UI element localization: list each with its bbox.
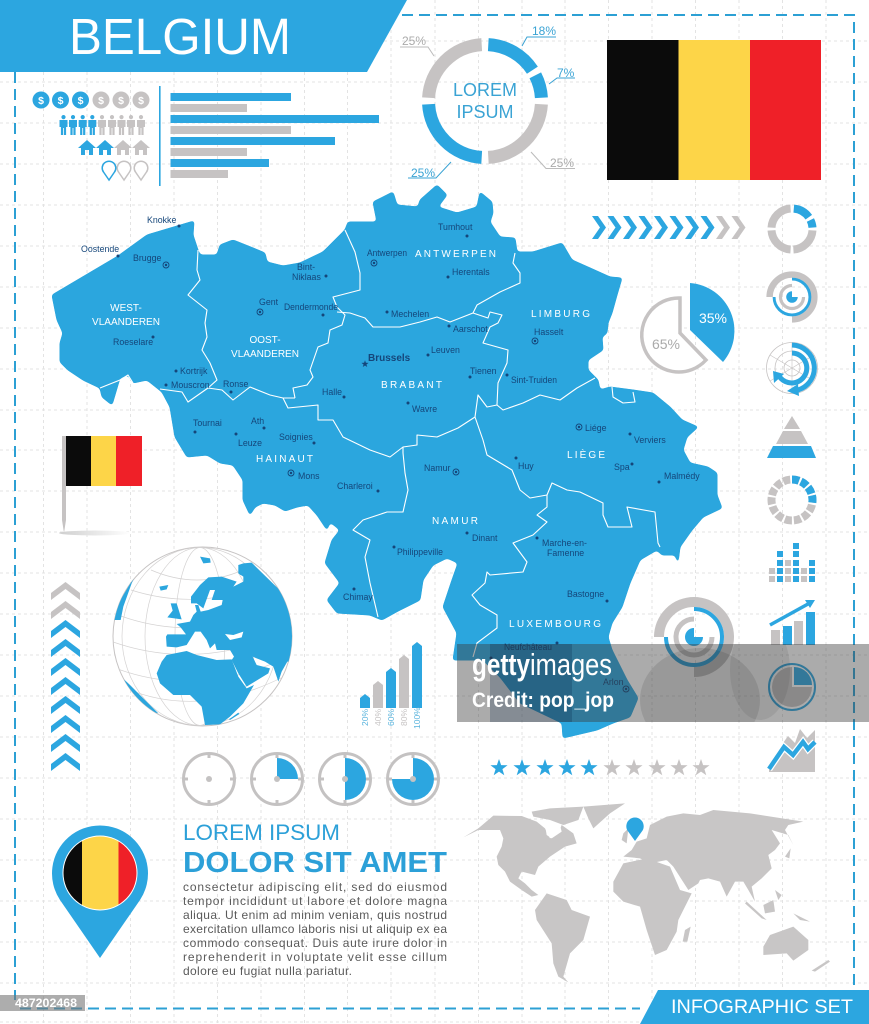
province borders (100, 230, 660, 657)
city names: Ronse (223, 379, 249, 389)
body paragraph: reprehenderit in voluptate velit esse cillum (183, 950, 447, 964)
city names: Oostende (81, 244, 119, 254)
arrow bar chart: 60% (386, 709, 396, 726)
icon row: location pins (102, 161, 148, 180)
city names: Niklaas (292, 272, 321, 282)
title banner (0, 0, 407, 72)
city names: Kortrijk (180, 366, 208, 376)
arrow bar chart: 40% (373, 709, 383, 726)
province names: LUXEMBOURG (509, 619, 601, 630)
city names: Bint- (297, 262, 315, 272)
body paragraph: consectetur adipiscing elit, sed do eiusmod (183, 880, 447, 894)
icon row: dollar coins: $ (118, 95, 124, 107)
province names: WEST- (110, 303, 142, 314)
right icon: segmented ring (772, 480, 812, 520)
watermark: Credit: pop_jop (472, 689, 614, 712)
location pin on world map (626, 818, 644, 841)
city names: Brussels (368, 353, 411, 364)
city names: Neufchâteau (504, 642, 552, 652)
city names: Huy (518, 461, 534, 471)
city names: Hasselt (534, 327, 564, 337)
right icon: growth chart (770, 600, 815, 645)
right icon: clock pie (769, 664, 815, 710)
city names: Leuven (431, 345, 460, 355)
province names: LIMBURG (531, 309, 590, 320)
city names: Gent (259, 297, 279, 307)
infographic set banner (640, 990, 869, 1024)
city names: Wavre (412, 404, 437, 414)
city names: Herentals (452, 267, 490, 277)
donut chart: lorem ipsum: 25% (402, 34, 426, 48)
province names: ANTWERPEN (415, 249, 496, 260)
icon row: dollar coins (32, 92, 150, 108)
body paragraph: dolore eu fugiat nulla pariatur. (183, 964, 352, 978)
province names: HAINAUT (256, 454, 313, 465)
city names: Philippeville (397, 547, 443, 557)
text block heading (183, 820, 447, 879)
city names: Chimay (343, 592, 373, 602)
city names: Marche-en- (542, 538, 587, 548)
city names: Malmédy (664, 471, 700, 481)
map of Belgium (52, 185, 722, 738)
city names: Leuze (238, 438, 262, 448)
donut chart: lorem ipsum: IPSUM (456, 102, 514, 122)
city names: Famenne (547, 548, 584, 558)
city names: Liége (585, 423, 607, 433)
title banner: BELGIUM (69, 8, 291, 65)
image id tag (0, 995, 85, 1011)
pie chart 35% / 65% (642, 283, 734, 372)
icon row: dollar coins: $ (138, 95, 144, 107)
city names: Roeselare (113, 337, 153, 347)
province names: LIÈGE (567, 448, 605, 461)
city names: Mons (298, 471, 320, 481)
body paragraph: aliqua. Ut enim ad minim veniam, quis nostrud (183, 908, 447, 922)
watermark: images (530, 647, 612, 682)
city names: Spa (614, 462, 630, 472)
city names: Bastogne (567, 589, 604, 599)
city names: Mouscron (171, 380, 210, 390)
body paragraph: exercitation ullamco laboris nisi ut aliquip ex ea (183, 922, 447, 936)
city names: Soignies (279, 432, 313, 442)
donut chart: lorem ipsum: 25% (411, 166, 435, 180)
city names: Tournai (193, 418, 222, 428)
donut chart: lorem ipsum (400, 24, 575, 180)
country shape (52, 185, 722, 738)
large Belgian flag (607, 40, 821, 180)
upward chevrons (51, 582, 80, 771)
donut chart: lorem ipsum: 7% (557, 66, 575, 80)
city names: Dinant (472, 533, 498, 543)
globe (113, 547, 297, 726)
city names: Ath (251, 416, 264, 426)
text block heading: DOLOR SIT AMET (183, 847, 447, 879)
watermark: getty (472, 647, 531, 682)
right icon: donut (772, 208, 812, 250)
arrow bar chart (360, 642, 422, 729)
city names: Aarschot (453, 324, 488, 334)
clock gauges (183, 753, 439, 805)
icon row: dollar coins: $ (58, 95, 64, 107)
right icon: area chart (769, 729, 815, 772)
right icon: pyramid (767, 416, 816, 458)
city names: Halle (322, 387, 342, 397)
small flag on pole (59, 436, 142, 536)
province names: VLAANDEREN (231, 349, 299, 360)
infographic set banner: INFOGRAPHIC SET (671, 997, 853, 1018)
donut chart: lorem ipsum: LOREM (453, 80, 517, 100)
city names (81, 215, 700, 687)
body paragraph: tempor incididunt ut labore et dolore magna (183, 894, 447, 908)
icon row: dollar coins: $ (78, 95, 84, 107)
city names: Antwerpen (367, 248, 407, 258)
city names: Tumhout (438, 222, 473, 232)
horizontal bar chart (159, 86, 379, 186)
image id tag: 487202468 (15, 998, 78, 1010)
right icon: concentric arcs (770, 275, 814, 319)
world map (463, 803, 830, 982)
province names: VLAANDEREN (92, 317, 160, 328)
city markers (116, 224, 660, 692)
icon row: houses (78, 140, 150, 155)
icon row: dollar coins: $ (98, 95, 104, 107)
city names: Arlon (603, 677, 624, 687)
star rating (490, 759, 710, 775)
donut chart: lorem ipsum: 18% (532, 24, 556, 38)
city names: Tienen (470, 366, 497, 376)
pie chart 35% / 65%: 65% (652, 336, 680, 352)
watermark (457, 644, 869, 722)
arrow bar chart: 80% (399, 709, 409, 726)
pie chart 35% / 65%: 35% (699, 310, 727, 326)
donut chart: lorem ipsum: 25% (550, 156, 574, 170)
city names: Charleroi (337, 481, 373, 491)
city names: Namur (424, 463, 450, 473)
map pin with flag (52, 825, 148, 958)
province names (92, 249, 605, 630)
body paragraph: commodo consequat. Duis aute irure dolor in (183, 936, 447, 950)
province names: NAMUR (432, 516, 478, 527)
city names: Mechelen (391, 309, 429, 319)
concentric arcs chart (659, 602, 729, 672)
right icon: equalizer (769, 543, 815, 582)
arrow bar chart: 20% (360, 709, 370, 726)
arrow bar chart: 100% (412, 707, 422, 729)
chevron arrows row (592, 216, 746, 239)
icon row: people (60, 115, 145, 135)
city names: Verviers (634, 435, 666, 445)
city names: Dendermonde (284, 302, 338, 312)
city names: Knokke (147, 215, 176, 225)
province names: BRABANT (381, 380, 442, 391)
icon row: dollar coins: $ (38, 95, 44, 107)
right icon: radial arrows (766, 342, 818, 396)
body paragraph (183, 880, 447, 978)
city names: Sint-Truiden (511, 375, 557, 385)
city names: Brugge (133, 253, 161, 263)
province names: OOST- (249, 335, 281, 346)
text block heading: LOREM IPSUM (183, 820, 340, 845)
